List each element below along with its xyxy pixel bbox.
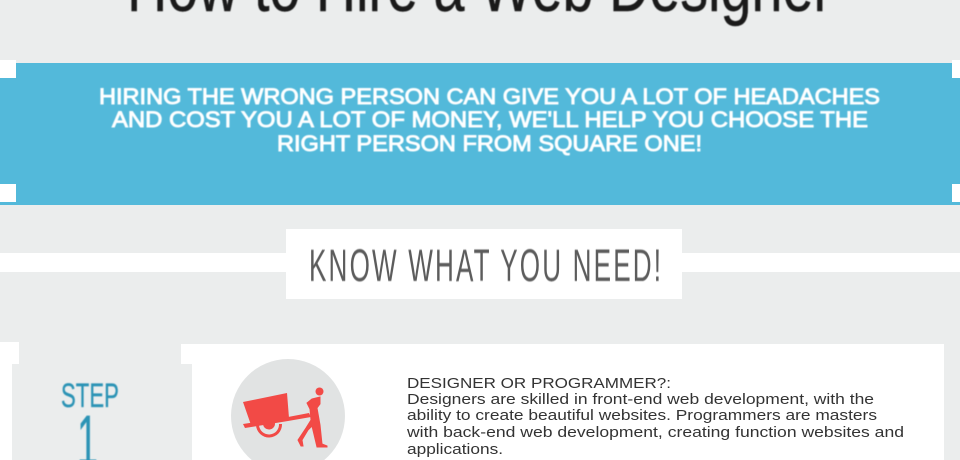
step description text: ability to create beautiful websites. Programmers are masters bbox=[407, 407, 877, 424]
banner text: RIGHT PERSON FROM SQUARE ONE! bbox=[277, 131, 702, 156]
step description text: applications. bbox=[407, 441, 503, 458]
step label bbox=[61, 377, 119, 460]
heading text: KNOW WHAT YOU NEED! bbox=[309, 241, 661, 291]
step label: STEP bbox=[61, 377, 119, 415]
banner text bbox=[99, 84, 880, 156]
banner text: AND COST YOU A LOT OF MONEY, WE'LL HELP YOU CHOOSE THE bbox=[112, 107, 868, 132]
panel: blue intro banner bbox=[0, 60, 960, 205]
icon: person pulling a cart bbox=[231, 359, 345, 460]
banner text: HIRING THE WRONG PERSON CAN GIVE YOU A LOT OF HEADACHES bbox=[99, 84, 880, 109]
panel: section heading bbox=[0, 229, 960, 299]
step description text: Designers are skilled in front-end web development, with the bbox=[407, 391, 874, 408]
step description text: DESIGNER OR PROGRAMMER?: bbox=[407, 375, 671, 392]
panel: step 1 row bbox=[0, 342, 944, 460]
step description text bbox=[406, 375, 904, 458]
step description text: with back-end web development, creating function websites and bbox=[406, 424, 904, 441]
